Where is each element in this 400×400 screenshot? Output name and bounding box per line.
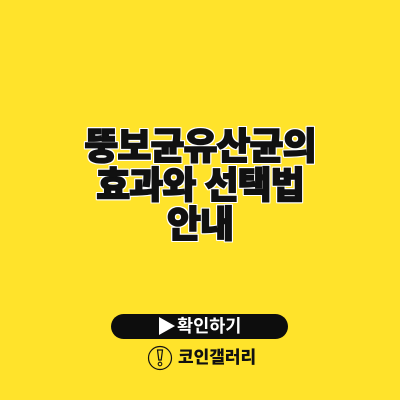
brand: 코인갤러리: [148, 346, 256, 370]
icon: exclamation circle: [148, 346, 172, 370]
title: 뚱보균유산균의: [84, 126, 316, 167]
title: 안내: [167, 204, 233, 245]
icon: play triangle: [159, 317, 175, 335]
title: 효과와 선택법: [96, 165, 304, 206]
title: [84, 126, 316, 245]
button: 확인하기: [111, 314, 288, 339]
button label: 확인하기: [177, 316, 241, 336]
brand name: 코인갤러리: [178, 348, 256, 367]
